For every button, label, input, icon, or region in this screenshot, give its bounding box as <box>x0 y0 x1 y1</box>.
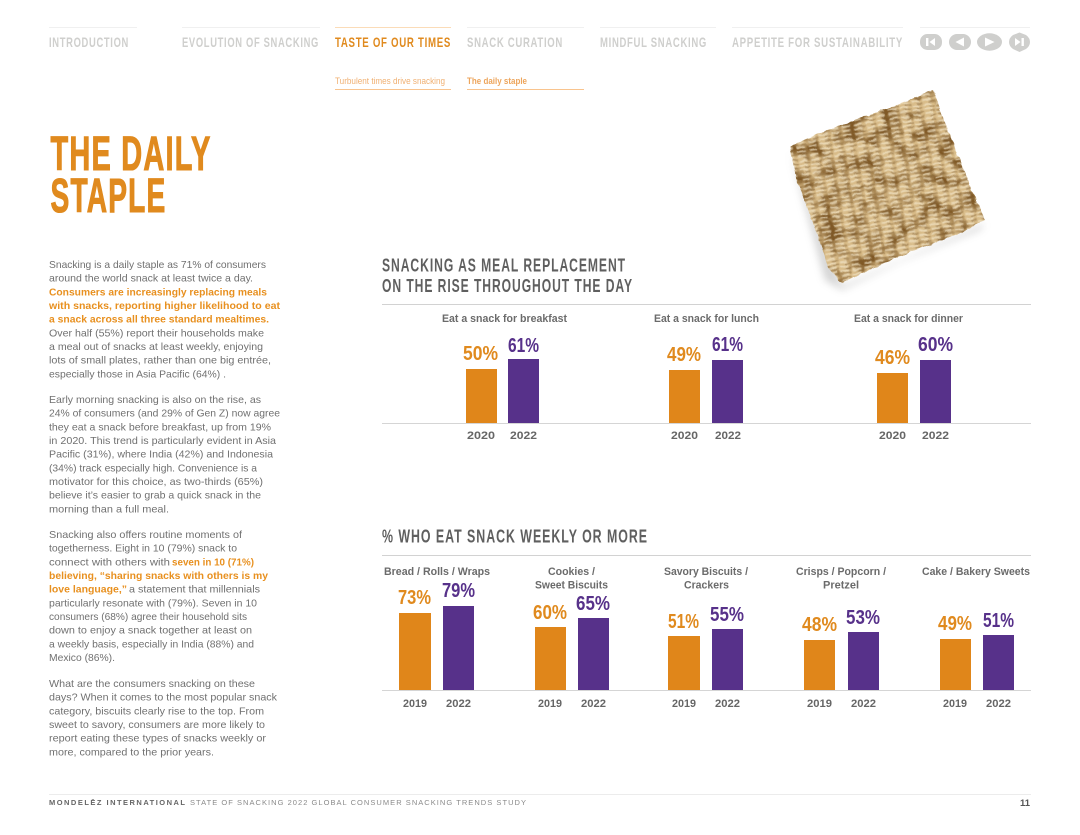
text block: popular snacks paragraph: more, compared to the prior years. <box>49 746 214 758</box>
chart group: savory biscuits crackers: 55% <box>710 604 744 626</box>
chart group: cake bakery sweets: Cake / Bakery Sweets <box>922 566 1030 578</box>
chart group: bread rolls wraps: 2022 <box>446 698 471 710</box>
chart group: cake bakery sweets <box>922 566 1030 710</box>
text block: togetherness paragraph: believing, “sharing snacks with others is my <box>49 570 268 582</box>
nav item: evolution of snacking: EVOLUTION OF SNACKING <box>182 34 319 50</box>
chart group: cake bakery sweets: 2022 <box>986 698 1011 710</box>
text block: popular snacks paragraph <box>49 678 278 758</box>
text block: early morning paragraph <box>49 394 280 515</box>
chart: weekly snack bars <box>382 566 1031 710</box>
text block: intro paragraph: a meal out of snacks at least weekly, enjoying <box>49 341 263 353</box>
chart group: crisps popcorn pretzel <box>796 566 886 710</box>
text block: togetherness paragraph: particularly resonate with (79%). Seven in 10 <box>49 597 257 609</box>
text block: intro paragraph: Over half (55%) report their households make <box>49 327 264 339</box>
nav item: mindful snacking: MINDFUL SNACKING <box>600 34 707 50</box>
text block: togetherness paragraph: connect with others with <box>49 556 170 568</box>
chart group: crisps popcorn pretzel: 53% <box>846 607 880 629</box>
text block: togetherness paragraph: togetherness. Eight in 10 (79%) snack to <box>49 543 237 555</box>
chart group: cookies sweet biscuits: Sweet Biscuits <box>535 580 608 592</box>
heading: snacking as meal replacement: SNACKING AS MEAL REPLACEMENT <box>382 256 626 276</box>
chart group: cookies sweet biscuits: 65% <box>576 593 610 615</box>
chart group: crisps popcorn pretzel: 2019 <box>807 698 832 710</box>
sub nav item: the daily staple: The daily staple <box>467 76 527 86</box>
text block: early morning paragraph: Pacific (31%), where India (42%) and Indonesia <box>49 449 273 461</box>
icon: previous page button <box>949 34 971 50</box>
chart group: lunch: 61% <box>712 334 743 356</box>
chart group: crisps popcorn pretzel: 48% <box>802 614 837 636</box>
chart group: bread rolls wraps: 2019 <box>403 698 427 710</box>
nav item: snack curation: SNACK CURATION <box>467 34 563 50</box>
text block: popular snacks paragraph: category, biscuits clearly rise to the top. From <box>49 705 264 717</box>
sub navigation <box>335 76 584 90</box>
chart group: dinner: 46% <box>875 347 910 369</box>
chart group: cake bakery sweets: 51% <box>983 610 1014 632</box>
chart group: dinner: 2020 <box>879 430 906 442</box>
text block: intro paragraph <box>48 259 280 380</box>
text block: togetherness paragraph: Snacking also offers routine moments of <box>49 529 242 541</box>
chart group: breakfast: 2022 <box>510 430 537 442</box>
chart group: savory biscuits crackers: Crackers <box>684 580 729 592</box>
title <box>50 128 212 223</box>
sub nav item: turbulent times: Turbulent times drive snacking <box>335 76 445 86</box>
chart group: bread rolls wraps <box>384 566 490 710</box>
heading: snacking as meal replacement <box>382 256 633 296</box>
text block: popular snacks paragraph: sweet to savory, consumers are more likely to <box>49 719 265 731</box>
chart group: dinner <box>854 313 964 442</box>
text block: popular snacks paragraph: report eating these types of snacks weekly or <box>49 733 267 745</box>
chart group: savory biscuits crackers: 2019 <box>672 698 696 710</box>
chart group: dinner: 2022 <box>922 430 949 442</box>
text block: togetherness paragraph: love language,” <box>49 584 127 596</box>
icon: first page button <box>920 34 942 50</box>
text block: togetherness paragraph: down to enjoy a snack together at least on <box>49 625 252 637</box>
chart group: breakfast: Eat a snack for breakfast <box>442 313 567 325</box>
chart group: breakfast: 2020 <box>467 430 495 442</box>
chart: meal replacement bars <box>382 313 1031 442</box>
text block: intro paragraph: a snack across all three standard mealtimes. <box>49 314 269 326</box>
image: shredded wheat cracker <box>790 90 985 292</box>
chart group: cookies sweet biscuits <box>533 566 610 710</box>
text block: togetherness paragraph <box>49 529 268 664</box>
text block: early morning paragraph: motivator for this choice, as two-thirds (65%) <box>49 476 263 488</box>
nav item: appetite for sustainability: APPETITE FOR SUSTAINABILITY <box>732 34 903 50</box>
chart group: lunch: 2020 <box>671 430 698 442</box>
chart group: savory biscuits crackers: 51% <box>668 611 699 633</box>
chart group: crisps popcorn pretzel: 2022 <box>851 698 876 710</box>
text block: early morning paragraph: believe it’s easier to grab a quick snack in the <box>49 490 261 502</box>
chart group: lunch: Eat a snack for lunch <box>654 313 759 325</box>
text block: early morning paragraph: morning than a full meal. <box>49 503 169 515</box>
chart group: bread rolls wraps: 79% <box>442 580 475 602</box>
heading: snacking as meal replacement: ON THE RISE THROUGHOUT THE DAY <box>382 276 633 296</box>
footer: company name: MONDELĒZ INTERNATIONAL <box>49 798 185 807</box>
chart group: cake bakery sweets: 2019 <box>943 698 967 710</box>
chart group: breakfast: 61% <box>508 335 539 357</box>
chart group: dinner: Eat a snack for dinner <box>854 313 964 325</box>
text block: early morning paragraph: in 2020. This trend is particularly evident in Asia <box>49 435 276 447</box>
title: STAPLE <box>50 170 166 223</box>
text block: popular snacks paragraph: days? When it comes to the most popular snack <box>49 692 278 704</box>
chart group: crisps popcorn pretzel: Crisps / Popcorn / <box>796 566 886 578</box>
text block: intro paragraph: with snacks, reporting higher likelihood to eat <box>48 300 280 312</box>
text block: togetherness paragraph: a statement that millennials <box>129 584 260 596</box>
text block: togetherness paragraph: consumers (68%) agree their household sits <box>49 611 247 623</box>
chart group: cookies sweet biscuits: 2022 <box>581 698 606 710</box>
text block: togetherness paragraph: a weekly basis, especially in India (88%) and <box>49 638 254 650</box>
icon: last page button <box>1009 32 1030 52</box>
text block: early morning paragraph: Early morning snacking is also on the rise, as <box>49 394 261 406</box>
chart group: lunch <box>654 313 759 442</box>
text block: intro paragraph: Snacking is a daily staple as 71% of consumers <box>49 259 266 271</box>
icon: next page button <box>977 33 1002 51</box>
chart group: cake bakery sweets: 49% <box>938 613 972 635</box>
text block: intro paragraph: especially those in Asia Pacific (64%) . <box>49 368 226 380</box>
chart group: savory biscuits crackers: Savory Biscuits / <box>664 566 748 578</box>
chart group: cookies sweet biscuits: Cookies / <box>548 566 595 578</box>
footer <box>49 794 1031 809</box>
chart group: breakfast: 50% <box>463 343 498 365</box>
chart group: bread rolls wraps: Bread / Rolls / Wraps <box>384 566 490 578</box>
chart group: breakfast <box>442 313 567 442</box>
chart group: bread rolls wraps: 73% <box>398 587 431 609</box>
text block: intro paragraph: lots of small plates, rather than one big entrée, <box>49 355 271 367</box>
text block: intro paragraph: around the world snack at least twice a day. <box>49 273 253 285</box>
footer: page number: 11 <box>1020 798 1031 809</box>
text block: early morning paragraph: they eat a snack before breakfast, up from 19% <box>49 421 271 433</box>
chart group: cookies sweet biscuits: 60% <box>533 602 567 624</box>
chart group: lunch: 2022 <box>715 430 741 442</box>
chart group: dinner: 60% <box>918 334 953 356</box>
nav item: introduction: INTRODUCTION <box>49 34 129 50</box>
heading: percent who eat snack weekly: % WHO EAT SNACK WEEKLY OR MORE <box>382 526 648 546</box>
chart group: lunch: 49% <box>667 344 701 366</box>
title: THE DAILY <box>50 128 212 181</box>
text block: popular snacks paragraph: What are the consumers snacking on these <box>49 678 255 690</box>
text block: togetherness paragraph: seven in 10 (71%) <box>172 556 254 568</box>
chart group: savory biscuits crackers <box>664 566 748 710</box>
text block: intro paragraph: Consumers are increasingly replacing meals <box>49 286 267 298</box>
nav item: taste of our times (active): TASTE OF OUR TIMES <box>335 34 451 50</box>
navigation bar <box>49 27 1030 50</box>
text block: early morning paragraph: 24% of consumers (and 29% of Gen Z) now agree <box>49 408 280 420</box>
chart group: crisps popcorn pretzel: Pretzel <box>823 580 859 592</box>
footer: report title: STATE OF SNACKING 2022 GLOBAL CONSUMER SNACKING TRENDS STUDY <box>190 798 526 807</box>
text block: early morning paragraph: (34%) track especially high. Convenience is a <box>49 462 257 474</box>
text block: togetherness paragraph: Mexico (86%). <box>49 652 115 664</box>
chart group: savory biscuits crackers: 2022 <box>715 698 740 710</box>
chart group: cookies sweet biscuits: 2019 <box>538 698 562 710</box>
